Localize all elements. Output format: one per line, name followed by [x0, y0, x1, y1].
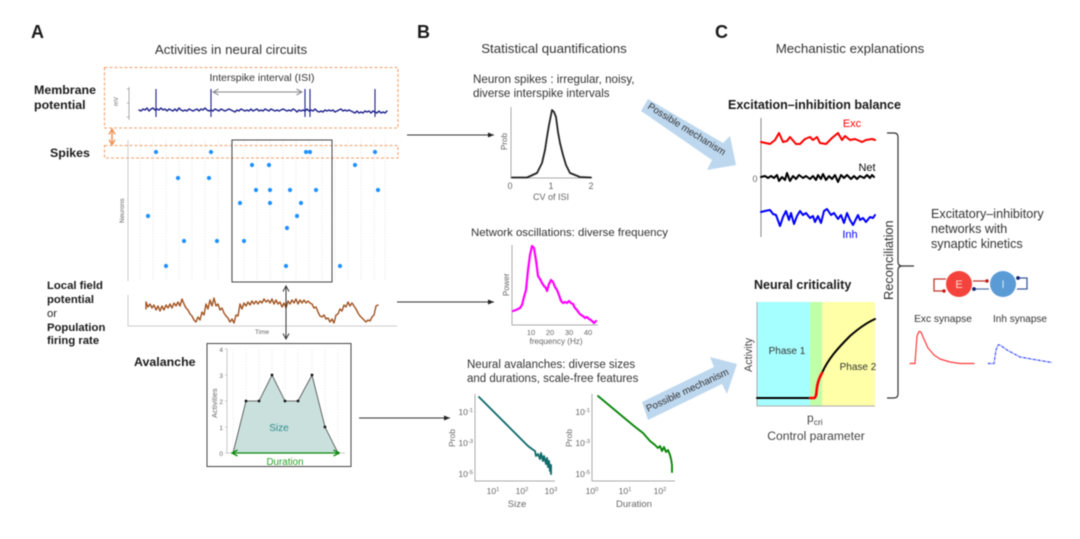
heading: activities in neural circuits: Activities in neural circuits	[155, 42, 307, 57]
text: network oscillations: Network oscillations: diverse frequency	[471, 227, 668, 239]
membrane potential trace	[139, 89, 387, 117]
text: neural avalanches	[467, 359, 639, 385]
panel C: mechanistic explanations	[715, 22, 1052, 443]
local field potential trace	[128, 295, 397, 336]
label: local field potential or population firing rate: firing rate	[47, 335, 99, 347]
chart: size distribution: 10	[516, 486, 525, 496]
chart: duration distribution: 10	[575, 407, 585, 417]
text: neural avalanches: and durations, scale-free features	[467, 373, 639, 385]
chart: power spectrum	[502, 245, 598, 346]
selection window box	[232, 140, 332, 282]
exc synapse kinetics	[910, 314, 974, 364]
panel A: activities in neural circuits	[31, 22, 398, 468]
chart: excitation, net and inhibition traces: Inh	[842, 229, 858, 241]
chart: size distribution: -5	[468, 470, 473, 476]
chart: size distribution: 10	[458, 469, 468, 479]
avalanche chart: 4	[219, 347, 223, 354]
orange double arrow	[111, 129, 113, 145]
exc synapse kinetics: Exc synapse	[914, 314, 972, 325]
text: neuron spikes	[473, 73, 635, 100]
label: local field potential or population firing rate: Population	[47, 322, 105, 334]
chart: CV of ISI distribution: CV of ISI	[533, 192, 569, 202]
label: spikes: Spikes	[50, 146, 90, 160]
chart: duration distribution: 10	[575, 469, 585, 479]
heading: mechanistic explanations: Mechanistic explanations	[776, 41, 925, 56]
chart: excitation, net and inhibition traces: Exc	[843, 118, 862, 130]
chart: neural criticality phase diagram: cri	[814, 417, 823, 427]
chart: size distribution: Prob	[447, 429, 457, 447]
E-I network diagram	[934, 271, 1027, 297]
chart: power spectrum: Power	[502, 273, 511, 296]
arrow: possible mechanism to neural criticality: Possible mechanism	[645, 367, 731, 415]
chart: duration distribution: 1	[628, 487, 631, 493]
panel letter B: B	[417, 22, 430, 42]
spike raster plot	[119, 140, 385, 281]
membrane potential dashed box	[104, 68, 398, 128]
chart: power spectrum: 10	[527, 328, 535, 337]
panel letter A: A	[31, 22, 44, 42]
chart: neural criticality phase diagram	[743, 302, 877, 443]
membrane potential axis: mV	[114, 97, 120, 106]
E-I network diagram: E	[955, 279, 963, 291]
spike raster plot: Neurons	[119, 198, 126, 223]
arrow: possible mechanism to E-I balance: Possible mechanism	[645, 101, 727, 158]
chart: power spectrum: 30	[565, 328, 573, 337]
label: local field potential or population firing rate: Local field	[47, 280, 103, 292]
chart: size distribution: Size	[508, 499, 526, 510]
chart: duration distribution: -5	[585, 470, 590, 476]
chart: duration distribution: 10	[654, 486, 663, 496]
label: membrane potential: potential	[34, 98, 86, 112]
chart: duration distribution: -1	[585, 408, 590, 414]
chart: duration distribution: Prob	[564, 429, 574, 447]
connector arrow: LFP to power chart	[397, 301, 494, 303]
chart: excitation, net and inhibition traces: Net	[858, 162, 876, 174]
chart: CV of ISI distribution: Prob	[500, 133, 509, 150]
panel B: statistical quantifications	[417, 22, 675, 510]
heading: neural criticality: Neural criticality	[754, 278, 851, 292]
chart: size distribution: -1	[468, 408, 473, 414]
chart: size distribution: 1	[496, 487, 499, 493]
text: neural avalanches: Neural avalanches: diverse sizes	[467, 359, 635, 371]
avalanche chart	[207, 344, 351, 468]
text: excitatory-inhibitory networks	[931, 207, 1044, 251]
chart: power spectrum: 40	[584, 328, 592, 337]
chart: duration distribution: 10	[575, 438, 585, 448]
chart: duration distribution: 0	[595, 487, 598, 493]
avalanche chart: Duration	[266, 457, 304, 468]
avalanche chart: Size	[269, 423, 289, 434]
connector arrow: spikes to CV chart	[407, 134, 494, 136]
connector arrow: avalanche to distributions	[359, 417, 450, 419]
chart: size distribution: 3	[554, 487, 557, 493]
chart: size distribution: 2	[525, 487, 528, 493]
label: local field potential or population firing rate: or	[47, 308, 57, 320]
reconciliation bracket	[881, 133, 914, 398]
heading: excitation-inhibition balance: Excitation–inhibition balance	[728, 98, 901, 112]
interspike interval arrow and label: Interspike interval (ISI)	[209, 72, 315, 84]
label: local field potential or population firing rate	[47, 280, 105, 347]
chart: power spectrum: 20	[546, 328, 554, 337]
text: neuron spikes: Neuron spikes : irregular, noisy,	[473, 73, 635, 86]
chart: size distribution	[447, 394, 557, 510]
E-I network diagram: I	[1001, 279, 1005, 291]
text: excitatory-inhibitory networks: networks with	[931, 222, 1007, 236]
chart: duration distribution: 10	[619, 486, 628, 496]
chart: duration distribution	[564, 394, 675, 510]
inh synapse kinetics: Inh synapse	[993, 314, 1047, 325]
double arrow to avalanche	[285, 286, 287, 339]
chart: CV of ISI distribution	[500, 107, 594, 202]
text: excitatory-inhibitory networks: Excitatory–inhibitory	[931, 207, 1044, 221]
chart: size distribution: 10	[458, 407, 468, 417]
text: excitatory-inhibitory networks: synaptic kinetics	[931, 237, 1023, 251]
chart: size distribution: 10	[458, 438, 468, 448]
chart: duration distribution: 10	[586, 486, 595, 496]
avalanche chart: Activities	[210, 388, 219, 418]
avalanche chart: 3	[219, 373, 223, 380]
chart: size distribution: 10	[487, 486, 496, 496]
chart: CV of ISI distribution: 1	[548, 181, 554, 191]
chart: size distribution: 10	[545, 486, 554, 496]
label: membrane potential: Membrane	[34, 83, 96, 97]
chart: duration distribution: Duration	[616, 499, 652, 510]
membrane potential axis	[114, 87, 129, 120]
chart: CV of ISI distribution: 2	[588, 181, 594, 191]
chart: excitation, net and inhibition traces: 0	[752, 174, 758, 184]
avalanche chart: 2	[219, 399, 223, 406]
chart: size distribution: -3	[468, 439, 473, 445]
avalanche chart: 0	[219, 451, 223, 458]
spikes dashed box	[104, 146, 398, 158]
chart: duration distribution: 2	[663, 487, 666, 493]
label: local field potential or population firing rate: potential	[47, 294, 94, 306]
arrow: possible mechanism to neural criticality	[642, 357, 737, 420]
chart: neural criticality phase diagram: Control parameter	[767, 429, 865, 443]
label: avalanche: Avalanche	[134, 355, 196, 369]
chart: excitation, net and inhibition traces	[752, 118, 876, 241]
chart: CV of ISI distribution: 0	[507, 181, 513, 191]
reconciliation bracket: Reconciliation	[881, 220, 896, 300]
arrow: possible mechanism to E-I balance	[641, 99, 736, 170]
chart: power spectrum: frequency (Hz)	[529, 337, 583, 346]
local field potential trace: Time	[255, 329, 269, 336]
chart: neural criticality phase diagram: Phase 1	[769, 346, 806, 357]
avalanche chart: 1	[219, 425, 223, 432]
chart: duration distribution: -3	[585, 439, 590, 445]
heading: statistical quantifications: Statistical quantifications	[481, 41, 627, 56]
chart: neural criticality phase diagram: Activity	[743, 337, 755, 372]
inh synapse kinetics	[988, 314, 1052, 364]
label: membrane potential	[34, 83, 96, 112]
panel letter C: C	[715, 22, 728, 42]
text: neuron spikes: diverse interspike intervals	[473, 87, 610, 100]
chart: neural criticality phase diagram: Phase 2	[840, 362, 877, 373]
interspike interval arrow and label	[209, 72, 315, 92]
chart: neural criticality phase diagram: p	[807, 411, 814, 425]
